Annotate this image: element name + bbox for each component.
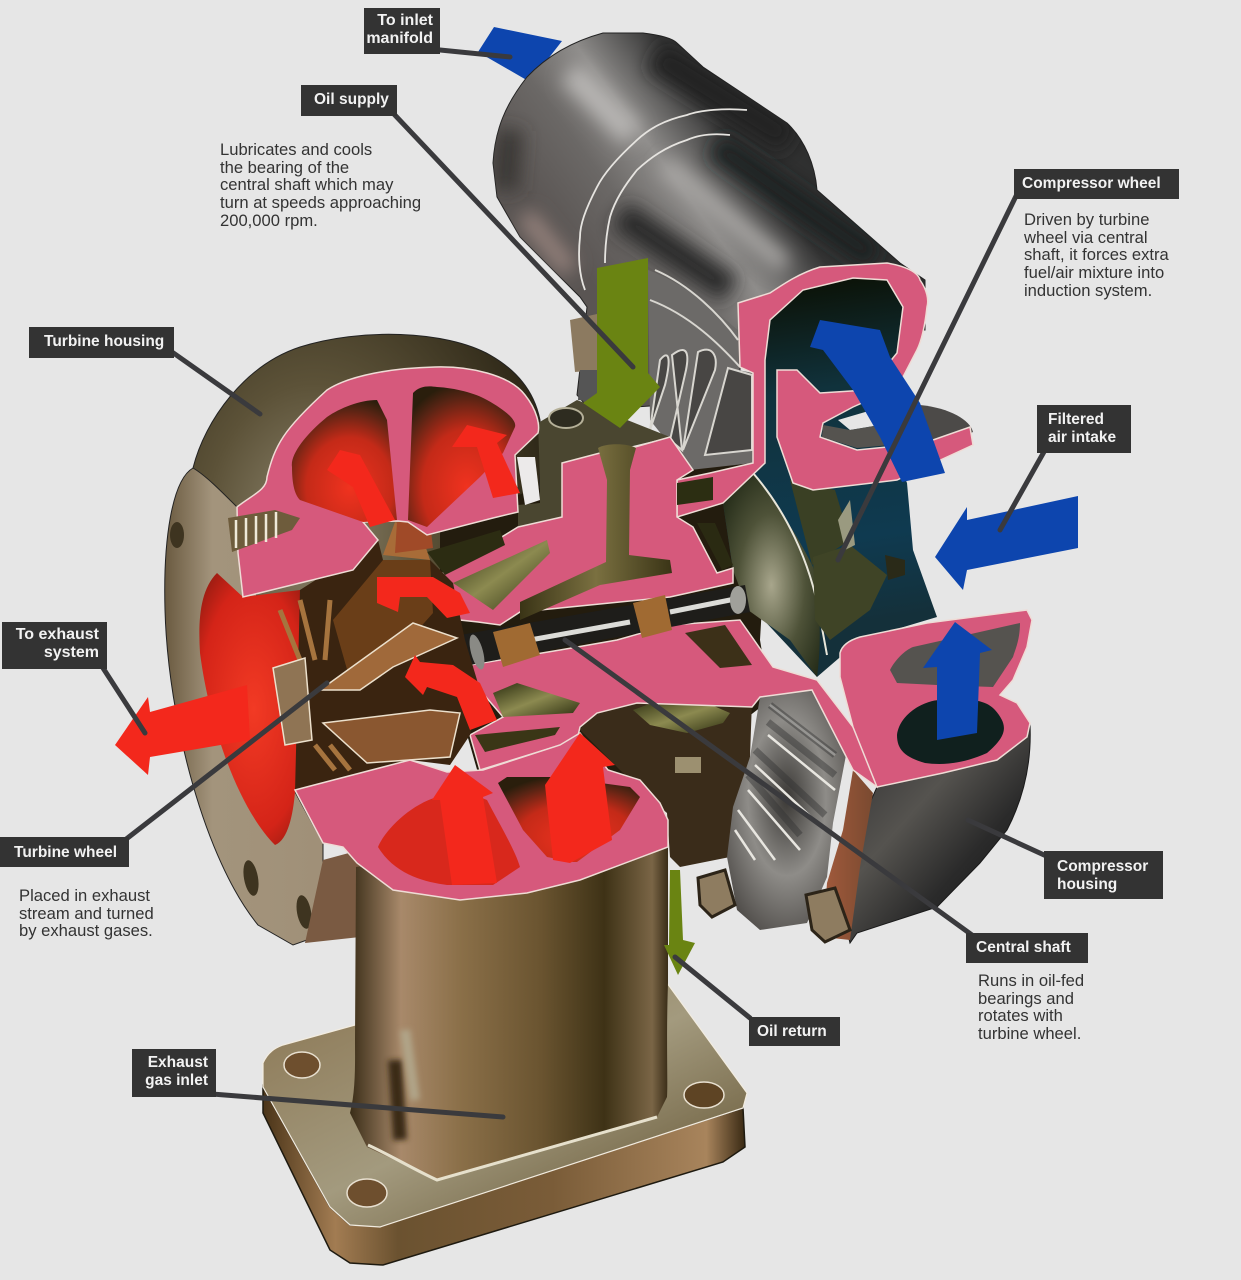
compressor back piece behind volute xyxy=(885,405,973,470)
label: To inlet manifold: manifold xyxy=(366,30,433,47)
label: Compressor housing: housing xyxy=(1057,876,1117,893)
label: Central shaft: Central shaft xyxy=(976,939,1071,956)
pink section: turbine volute bottom xyxy=(295,733,668,900)
pink section: turbine volute top xyxy=(228,367,540,597)
label: Turbine wheel xyxy=(0,837,129,867)
turbine wheel xyxy=(273,522,480,792)
pink section: compressor volute top xyxy=(677,263,973,517)
text: oil supply description: 200,000 rpm. xyxy=(220,211,318,230)
text: turbine wheel description: by exhaust gases. xyxy=(19,921,153,940)
text: central shaft description xyxy=(978,971,1084,1043)
text: oil supply description: central shaft which may xyxy=(220,175,393,194)
text: oil supply description: Lubricates and cools xyxy=(220,140,372,159)
text: oil supply description: turn at speeds approaching xyxy=(220,193,421,212)
seal slot xyxy=(685,625,752,668)
text: oil supply description: the bearing of the xyxy=(220,158,349,177)
label: Turbine wheel: Turbine wheel xyxy=(14,844,117,861)
label: Compressor housing: Compressor xyxy=(1057,858,1148,875)
diffuser fins upper xyxy=(648,270,753,470)
text: oil supply description xyxy=(220,140,421,230)
arrow: to inlet manifold xyxy=(478,27,562,82)
label: To exhaust system: To exhaust xyxy=(16,626,99,643)
turbine housing flange face xyxy=(165,468,360,945)
label: To inlet manifold: To inlet xyxy=(377,12,433,29)
label: Oil return xyxy=(749,1017,840,1046)
compressor wheel xyxy=(723,473,905,677)
central shaft with bearings xyxy=(460,585,750,671)
label: Compressor wheel xyxy=(1014,169,1179,199)
label: Exhaust gas inlet: gas inlet xyxy=(145,1072,208,1089)
label: Compressor housing xyxy=(1044,851,1163,899)
label: Oil return: Oil return xyxy=(757,1023,827,1040)
pink section: bearing housing lower band xyxy=(470,620,880,787)
lower oil slot xyxy=(493,683,580,717)
bearing block top face xyxy=(518,400,670,527)
label: Turbine housing: Turbine housing xyxy=(44,333,164,350)
label: To inlet manifold xyxy=(364,8,440,54)
text: central shaft description: rotates with xyxy=(978,1006,1063,1025)
text: central shaft description: Runs in oil-fed xyxy=(978,971,1084,990)
text: turbine wheel description: stream and turned xyxy=(19,904,154,923)
oil passages xyxy=(427,444,733,620)
text: compressor wheel description: shaft, it forces extra xyxy=(1024,245,1169,264)
text: compressor wheel description: Driven by turbine xyxy=(1024,210,1149,229)
text: central shaft description: turbine wheel. xyxy=(978,1024,1081,1043)
bearing body lower xyxy=(580,700,752,867)
pink section: bearing housing centre xyxy=(443,437,733,625)
leader lines xyxy=(103,48,1055,1117)
label: Filtered air intake: Filtered xyxy=(1048,411,1104,428)
diffuser disc with fins xyxy=(727,690,847,930)
text: compressor wheel description: induction system. xyxy=(1024,281,1152,300)
text: turbine wheel description: Placed in exhaust xyxy=(19,886,150,905)
gap under volute arm xyxy=(822,410,890,448)
label: Oil supply: Oil supply xyxy=(314,91,389,108)
text: compressor wheel description xyxy=(1024,210,1169,300)
compressor housing xyxy=(823,725,1030,943)
text: compressor wheel description: wheel via central xyxy=(1024,228,1148,247)
oil return arrow xyxy=(664,870,695,975)
label: Turbine housing xyxy=(29,327,174,358)
label: To exhaust system xyxy=(2,622,107,669)
return oil cavity xyxy=(475,727,560,752)
label: Filtered air intake: air intake xyxy=(1048,429,1116,446)
label: To exhaust system: system xyxy=(44,644,99,661)
exhaust gas inlet column and flange xyxy=(263,820,747,1265)
oil supply arrow xyxy=(583,258,660,428)
centre backing xyxy=(440,440,770,800)
turbine housing dome xyxy=(193,334,540,800)
label: Compressor wheel: Compressor wheel xyxy=(1022,175,1161,192)
blue flow arrows xyxy=(810,320,1078,740)
bolts xyxy=(570,314,850,942)
label: Oil supply xyxy=(301,85,397,116)
text: central shaft description: bearings and xyxy=(978,989,1074,1008)
red flow arrows xyxy=(115,425,615,885)
pink section: compressor volute bottom xyxy=(840,610,1032,787)
label: Exhaust gas inlet: Exhaust xyxy=(148,1054,208,1071)
text: turbine wheel description xyxy=(19,886,154,940)
compressor volute inside teal xyxy=(723,278,937,677)
label: Filtered air intake xyxy=(1037,405,1131,453)
compressor outlet pipe xyxy=(493,33,925,410)
label: Central shaft xyxy=(966,933,1088,963)
text: compressor wheel description: fuel/air mixture into xyxy=(1024,263,1164,282)
turbocharger illustration xyxy=(100,27,1078,1266)
label: Exhaust gas inlet xyxy=(132,1049,216,1097)
